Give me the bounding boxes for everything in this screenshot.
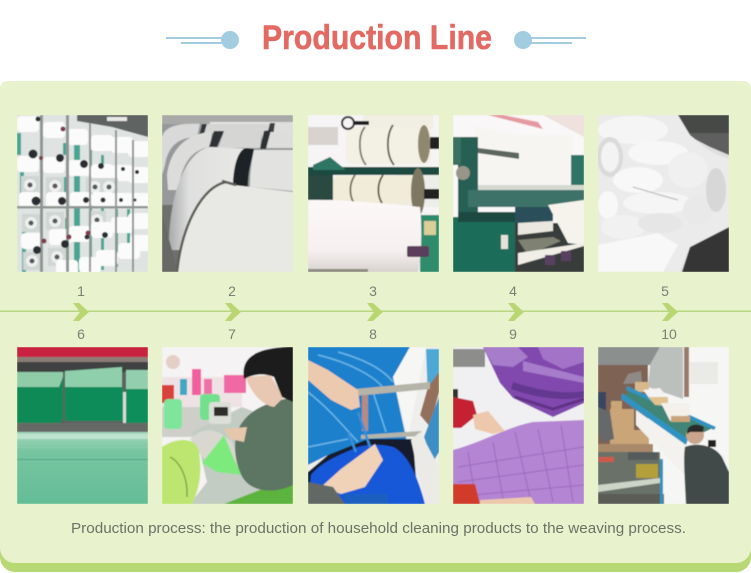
photo 8: measuring a blue towel: [308, 347, 439, 504]
step numbers: 6: [77, 326, 85, 342]
step numbers: 9: [509, 326, 517, 342]
arrow 5: [662, 303, 678, 321]
photo 9: checking purple towels: [453, 347, 584, 504]
step numbers: 10: [661, 326, 677, 342]
arrow 1: [73, 303, 89, 321]
timeline line: [0, 310, 751, 312]
heading: Production Line: [262, 19, 492, 57]
step numbers: 7: [228, 326, 236, 342]
decoration: right lines and dot: [514, 31, 586, 49]
arrows row: [73, 303, 678, 321]
arrow 2: [225, 303, 241, 321]
step numbers: [77, 283, 677, 342]
step numbers: 4: [509, 283, 517, 299]
step numbers: 2: [228, 283, 236, 299]
arrow 3: [367, 303, 383, 321]
step numbers: 1: [77, 283, 85, 299]
step numbers: 3: [369, 283, 377, 299]
photo 2: large white fabric rolls: [162, 115, 293, 272]
photo 3: white rolls on green machine: [308, 115, 439, 272]
decoration: left lines and dot: [166, 31, 239, 49]
title with decorations: [166, 19, 586, 57]
photo 10: loading cartons onto truck: [598, 347, 729, 504]
step numbers: 8: [369, 326, 377, 342]
photo 7: worker at sewing machine: [162, 347, 293, 504]
arrow 4: [508, 303, 524, 321]
caption: Production process: the production of household cleaning products to the weaving process.: [71, 520, 686, 537]
step numbers: 5: [661, 283, 669, 299]
photo 5: stacked white fabric: [597, 115, 729, 272]
photo 1: yarn spools on racks: [17, 115, 152, 276]
photo 4: fabric inspection machine: [453, 115, 584, 272]
photo 6: green towel stacks: [17, 347, 148, 504]
